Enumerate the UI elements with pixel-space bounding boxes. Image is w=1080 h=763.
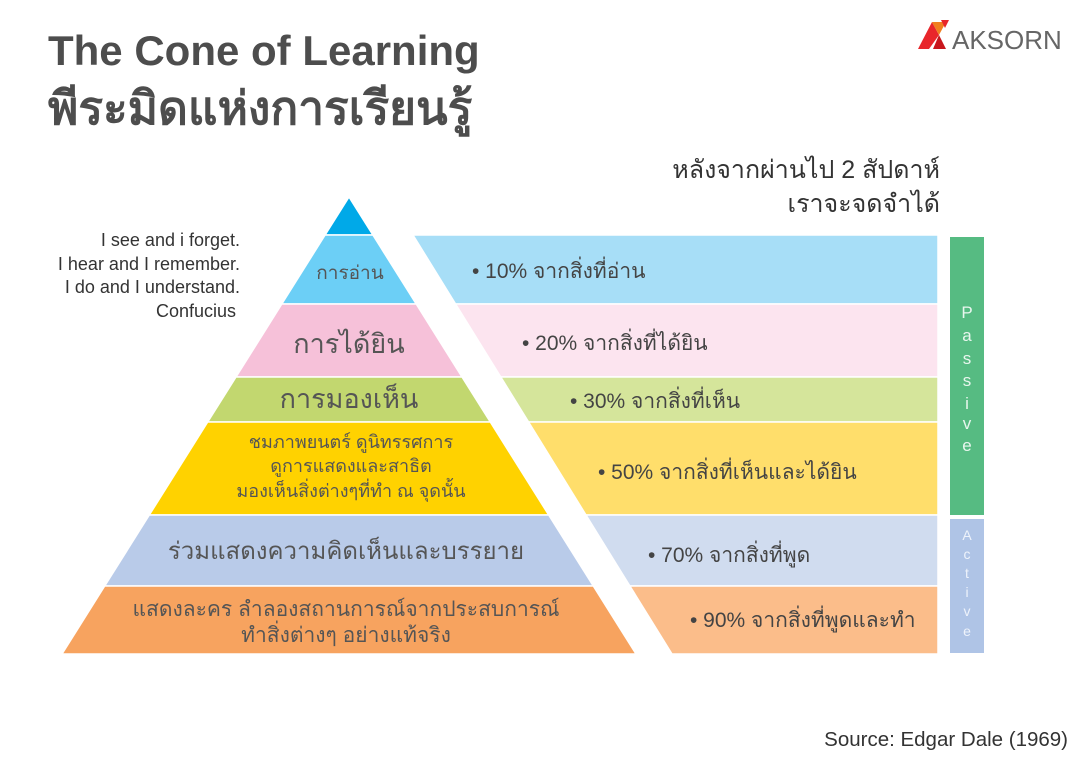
active bar bbox=[950, 519, 984, 653]
quote: I see and i forget. bbox=[101, 230, 240, 250]
retention labels: • 30% จากสิ่งที่เห็น bbox=[570, 386, 740, 413]
quote: Confucius bbox=[156, 301, 236, 321]
quote bbox=[58, 230, 240, 321]
pyramid labels: ร่วมแสดงความคิดเห็นและบรรยาย bbox=[168, 536, 524, 565]
source: Source: Edgar Dale (1969) bbox=[824, 728, 1068, 751]
retention labels: • 10% จากสิ่งที่อ่าน bbox=[472, 256, 646, 283]
quote: I hear and I remember. bbox=[58, 254, 240, 274]
pyramid labels: แสดงละคร ลำลองสถานการณ์จากประสบการณ์ bbox=[132, 597, 560, 621]
passive bar: s bbox=[963, 349, 971, 368]
passive bar: s bbox=[963, 371, 971, 390]
pyramid bbox=[62, 197, 636, 654]
active bar: c bbox=[964, 546, 970, 562]
pyramid labels: การอ่าน bbox=[316, 263, 384, 284]
subtitle: after 2 weeks bbox=[672, 155, 940, 218]
active bar: A bbox=[962, 527, 972, 543]
active bar: v bbox=[964, 603, 970, 619]
subtitle: after 2 weeks: หลังจากผ่านไป 2 สัปดาห์ bbox=[672, 155, 940, 184]
retention bands bbox=[413, 235, 938, 654]
pyramid labels: ชมภาพยนตร์ ดูนิทรรศการ bbox=[249, 432, 454, 453]
retention labels: • 90% จากสิ่งที่พูดและทำ bbox=[690, 605, 916, 633]
pyramid labels: การมองเห็น bbox=[280, 381, 418, 414]
title: พีระมิดแห่งการเรียนรู้ bbox=[48, 82, 473, 137]
title: The Cone of Learning bbox=[48, 27, 480, 74]
subtitle: after 2 weeks: เราจะจดจำได้ bbox=[788, 189, 940, 218]
passive bar: a bbox=[962, 326, 972, 345]
passive bar: v bbox=[963, 414, 972, 433]
logo: AKSORN bbox=[952, 25, 1062, 55]
retention labels: • 70% จากสิ่งที่พูด bbox=[648, 540, 810, 568]
logo bbox=[918, 20, 1062, 55]
title bbox=[48, 27, 480, 137]
active bar: t bbox=[965, 565, 969, 581]
pyramid labels: มองเห็นสิ่งต่างๆที่ทำ ณ จุดนั้น bbox=[236, 478, 466, 502]
passive bar: e bbox=[962, 436, 972, 455]
retention labels: • 20% จากสิ่งที่ได้ยิน bbox=[522, 328, 708, 355]
active bar: i bbox=[965, 584, 969, 600]
retention labels bbox=[472, 256, 916, 633]
passive bar: i bbox=[965, 394, 969, 413]
pyramid labels: ทำสิ่งต่างๆ อย่างแท้จริง bbox=[241, 620, 451, 647]
retention labels: • 50% จากสิ่งที่เห็นและได้ยิน bbox=[598, 457, 857, 484]
passive bar: P bbox=[961, 303, 973, 322]
pyramid labels: ดูการแสดงและสาธิต bbox=[270, 456, 432, 477]
passive bar bbox=[950, 237, 984, 515]
pyramid labels bbox=[132, 263, 560, 647]
pyramid labels: การได้ยิน bbox=[293, 329, 405, 359]
active bar: e bbox=[963, 623, 971, 639]
quote: I do and I understand. bbox=[65, 277, 240, 297]
